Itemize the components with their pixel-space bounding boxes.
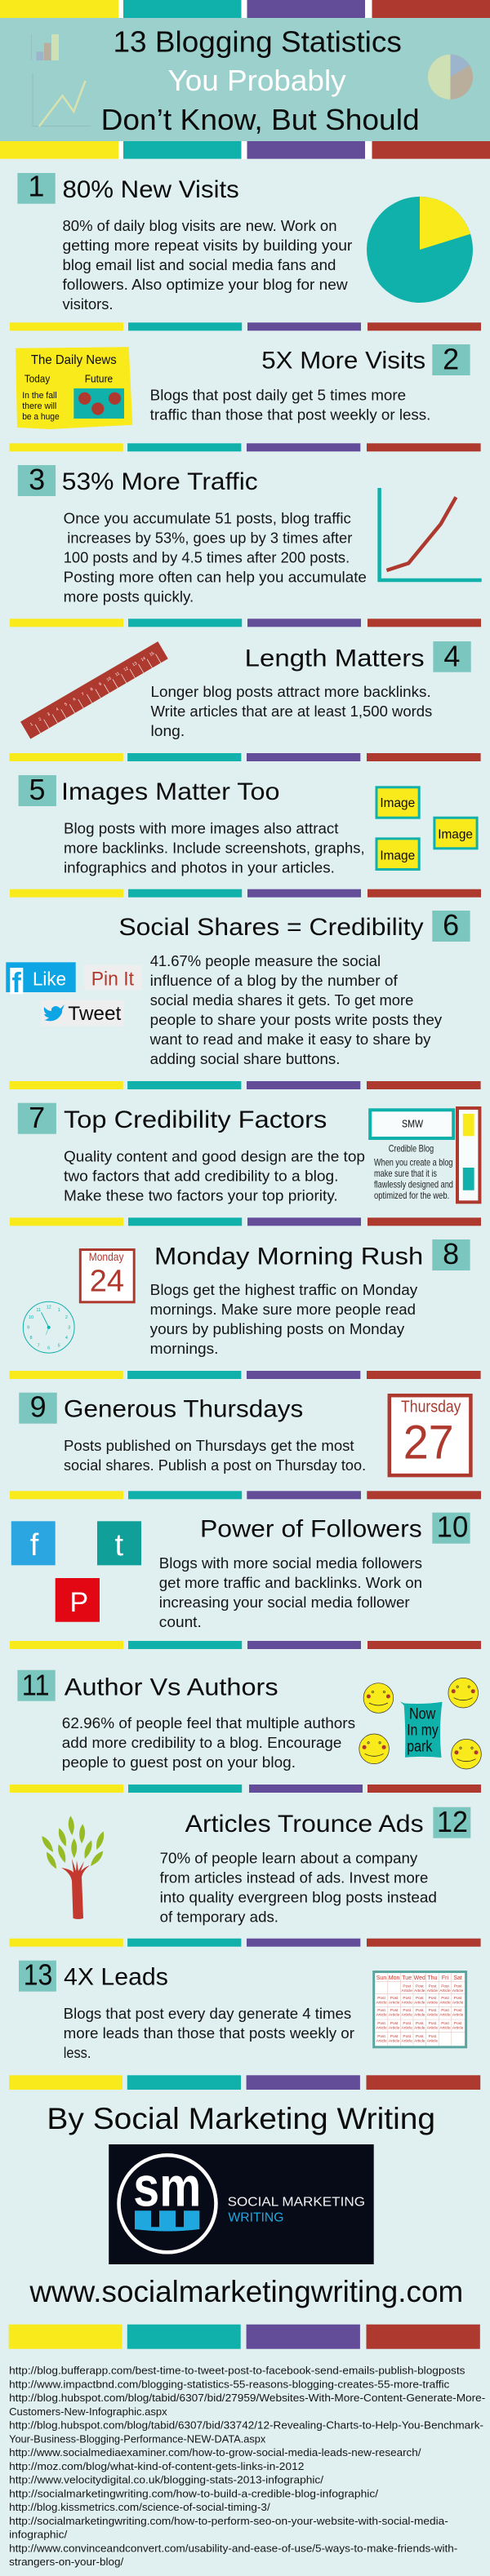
icon: posting calendar: Article <box>452 2001 464 2006</box>
body text: more posts quickly. <box>64 587 194 605</box>
icon: newspaper: The Daily News <box>31 353 117 367</box>
icon: posting calendar: Article <box>414 1989 425 1993</box>
credit heading: By Social Marketing Writing <box>47 2102 435 2135</box>
sources list: http://blog.bufferapp.com/best-time-to-tweet-post-to-facebook-send-emails-publish-blogposts <box>9 2365 466 2377</box>
number badge 12: 12 <box>437 1805 468 1838</box>
icon: clock: 4 <box>65 1336 68 1341</box>
icon: posting calendar: Article <box>414 2026 425 2031</box>
heading: Images Matter Too <box>61 778 279 805</box>
icon: posting calendar: Post <box>403 2034 412 2039</box>
body text: count. <box>159 1613 202 1630</box>
icon: smiley bottom left <box>359 1734 389 1764</box>
number badge 8: 8 <box>443 1237 459 1270</box>
icon: posting calendar: Post <box>454 1996 462 2001</box>
number badge 9: 9 <box>30 1390 47 1424</box>
panel: 5 images matter <box>19 773 477 876</box>
icon: posting calendar: Sat <box>453 1975 462 1981</box>
body text: Write articles that are at least 1,500 words <box>150 703 432 720</box>
icon: clock: 8 <box>29 1336 33 1341</box>
body text <box>64 819 365 876</box>
icon: posting calendar: Sun <box>376 1975 386 1981</box>
heading: Length Matters <box>245 645 425 672</box>
icon: posting calendar: Post <box>403 2021 412 2026</box>
body text: social media shares it gets. To get more <box>150 991 413 1009</box>
body text: want to read and make it easy to share by <box>149 1031 431 1048</box>
icon: clock: 10 <box>29 1315 33 1320</box>
icon: thursday calendar: 27 <box>403 1417 454 1470</box>
body text: more leads than those that posts weekly or <box>64 2024 354 2042</box>
body text: Blogs with more social media followers <box>159 1554 422 1572</box>
icon: posting calendar: Post <box>429 1984 437 1989</box>
sources list: http://blog.hubspot.com/blog/tabid/6307/bid/33742/12-Revealing-Charts-to-Help-You-Benchmark- <box>9 2419 483 2432</box>
icon: note now in my park: park <box>407 1739 433 1756</box>
icon: posting calendar: Article <box>427 1989 438 1993</box>
icon: posting calendar: Article <box>414 2001 425 2006</box>
icon: ruler: 3 <box>47 712 51 717</box>
icon: clock: 2 <box>65 1315 68 1320</box>
body text: influence of a blog by the number of <box>150 972 399 989</box>
icon: clock: 5 <box>58 1343 60 1348</box>
body text <box>159 1554 422 1630</box>
icon: ruler: 8 <box>90 687 94 692</box>
body text <box>150 1281 418 1357</box>
body text: 70% of people learn about a company <box>160 1849 418 1866</box>
sources list: http://www.impactbnd.com/blogging-statistics-55-reasons-blogging-creates-55-more-traffic <box>9 2378 450 2391</box>
logo: social marketing writing: sm <box>133 2155 201 2218</box>
body text <box>62 217 352 313</box>
icon: pinterest tile: P <box>69 1587 88 1618</box>
icon: posting calendar: Article <box>389 2039 400 2044</box>
icon: ruler: 6 <box>73 697 77 703</box>
icon: monday calendar: 24 <box>90 1264 124 1298</box>
icon: posting calendar: Wed <box>414 1975 425 1981</box>
number badge 6 <box>432 908 470 942</box>
sources list: infographic/ <box>9 2529 68 2541</box>
icon: newspaper: Today <box>24 373 51 384</box>
logo: social marketing writing: WRITING <box>228 2211 284 2225</box>
icon: pin it button: Pin It <box>91 969 134 991</box>
number badge 5: 5 <box>29 773 46 806</box>
icon: posting calendar: Article <box>402 2039 412 2044</box>
icon: posting calendar: Article <box>427 2039 438 2044</box>
icon: posting calendar: Post <box>429 2021 437 2026</box>
body text: of temporary ads. <box>160 1908 278 1925</box>
icon: posting calendar: Article <box>402 2001 412 2006</box>
icon: posting calendar: Post <box>441 1984 449 1989</box>
icon: image placeholder right: Image <box>438 827 473 841</box>
icon: posting calendar: Post <box>390 2021 399 2026</box>
icon: posting calendar: Article <box>427 2026 438 2031</box>
heading: Power of Followers <box>200 1516 422 1543</box>
icon: posting calendar <box>374 1971 466 2047</box>
body text: people to share your posts write posts they <box>150 1011 443 1028</box>
body text <box>64 2005 354 2061</box>
title text: Don’t Know, But Should <box>101 103 420 136</box>
icon: posting calendar: Post <box>454 2008 462 2013</box>
icon: posting calendar: Post <box>377 2034 385 2039</box>
body text: increases by 53%, goes up by 3 times after <box>67 529 352 546</box>
icon: posting calendar: Article <box>414 2039 425 2044</box>
sources list: http://www.socialmediaexaminer.com/how-to-grow-social-media-leads-new-research/ <box>9 2446 421 2459</box>
icon: twitter tile <box>97 1521 141 1565</box>
icon: posting calendar: Article <box>402 2026 412 2031</box>
pie chart 80 percent <box>367 197 473 303</box>
logo: social marketing writing: SOCIAL MARKETING <box>228 2195 365 2209</box>
title text: You Probably <box>168 64 346 97</box>
heading: Top Credibility Factors <box>64 1106 327 1133</box>
heading: 53% More Traffic <box>62 468 258 495</box>
icon: credible blog mockup: optimized for the web. <box>374 1190 449 1201</box>
icon: facebook tile <box>11 1521 56 1565</box>
icon: posting calendar: Post <box>390 2008 399 2013</box>
icon: posting calendar: Post <box>416 2008 424 2013</box>
icon: image placeholder top: Image <box>380 796 415 810</box>
body text <box>150 386 430 423</box>
icon: smiley bottom right <box>452 1739 481 1769</box>
icon: posting calendar: Post <box>441 2021 449 2026</box>
icon: posting calendar: Post <box>390 1996 399 2001</box>
number badge 7: 7 <box>29 1101 45 1134</box>
sources list: http://blog.kissmetrics.com/science-of-social-timing-3/ <box>9 2501 270 2513</box>
number badge 1: 1 <box>28 170 44 203</box>
body text: less. <box>64 2044 91 2061</box>
icon: ruler: 15 <box>149 651 155 658</box>
body text: mornings. <box>150 1340 219 1357</box>
icon: credible blog mockup: Credible Blog <box>389 1143 434 1155</box>
icon: newspaper: In the fall <box>22 391 57 401</box>
icon: ruler: 5 <box>64 702 69 707</box>
icon: posting calendar: Article <box>427 2001 438 2006</box>
icon: posting calendar: Post <box>429 2008 437 2013</box>
icon: credible blog mockup: make sure that it is <box>374 1168 437 1179</box>
icon: posting calendar: Article <box>439 2001 451 2006</box>
body text: Blogs get the highest traffic on Monday <box>150 1281 418 1298</box>
icon: posting calendar: Article <box>414 2013 425 2018</box>
body text: Posts published on Thursdays get the most <box>64 1437 354 1454</box>
icon: posting calendar: Thu <box>427 1975 438 1981</box>
icon: posting calendar: Mon <box>389 1975 400 1981</box>
number badge 1 <box>17 170 56 204</box>
heading: Social Shares = Credibility <box>118 914 424 941</box>
icon: posting calendar: Post <box>403 2008 412 2013</box>
icon: posting calendar: Tue <box>402 1975 412 1981</box>
icon: newspaper: Future <box>85 373 113 384</box>
icon: posting calendar: Article <box>402 2013 412 2018</box>
icon: clock <box>23 1301 74 1353</box>
icon: posting calendar: Post <box>416 1984 424 1989</box>
body text: traffic than those that post weekly or less. <box>150 406 430 423</box>
body text <box>149 952 443 1067</box>
heading: Generous Thursdays <box>64 1396 303 1423</box>
body text <box>160 1849 437 1925</box>
body text: yours by publishing posts on Monday <box>150 1320 405 1337</box>
body text: followers. Also optimize your blog for new <box>62 276 348 293</box>
body text: blog email list and social media fans and <box>62 256 336 273</box>
icon: thursday calendar <box>390 1395 470 1475</box>
icon: clock: 9 <box>27 1326 29 1331</box>
icon: note now in my park: In my <box>407 1723 439 1740</box>
body text: infographics and photos in your articles. <box>64 858 335 876</box>
icon: facebook like button: Like <box>33 969 66 990</box>
number badge 7 <box>18 1101 56 1134</box>
body text: Quality content and good design are the top <box>64 1147 365 1164</box>
icon: faded line chart <box>33 73 91 126</box>
icon: posting calendar: Post <box>403 1996 412 2001</box>
body text: get more traffic and backlinks. Work on <box>159 1574 422 1591</box>
icon: newspaper: be a huge <box>22 412 60 422</box>
line chart: rising traffic <box>380 488 482 580</box>
icon: posting calendar: Post <box>377 2021 385 2026</box>
icon: credible blog mockup: When you create a blog <box>374 1156 452 1168</box>
body text: Longer blog posts attract more backlinks. <box>150 683 431 700</box>
body text: Blogs that post daily get 5 times more <box>150 386 406 403</box>
sources list <box>9 2365 485 2568</box>
icon: faded bar chart <box>31 34 59 60</box>
icon: ruler: 1 <box>29 722 34 727</box>
number badge 13: 13 <box>24 1958 52 1992</box>
icon: clock: 6 <box>47 1346 50 1351</box>
icon: posting calendar: Post <box>390 2034 399 2039</box>
body text: 62.96% of people feel that multiple authors <box>62 1714 355 1731</box>
icon: posting calendar: Article <box>376 2013 387 2018</box>
body text: long. <box>150 722 185 739</box>
icon: twitter tile: t <box>115 1528 124 1563</box>
icon: clock: 3 <box>68 1326 70 1331</box>
icon: posting calendar: Article <box>452 2026 464 2031</box>
heading: Articles Trounce Ads <box>185 1811 424 1838</box>
icon: credible blog mockup: flawlessly designed and <box>374 1178 453 1190</box>
panel: 3 more traffic <box>18 463 482 605</box>
icon: thursday calendar: Thursday <box>401 1399 461 1417</box>
body text: Make these two factors your top priority. <box>64 1186 338 1204</box>
icon: ruler: 9 <box>98 681 103 687</box>
icon: tweet button <box>42 1000 124 1026</box>
icon: facebook like button <box>6 962 76 999</box>
icon: ruler: 12 <box>123 666 130 672</box>
icon: newspaper: there will <box>22 401 56 411</box>
body text <box>64 1437 366 1474</box>
icon: image placeholder top <box>376 787 419 818</box>
sources list: Your-Business-Blogging-Performance-NEW-DATA.aspx <box>9 2433 266 2445</box>
icon: posting calendar: Fri <box>442 1975 449 1981</box>
icon: posting calendar: Post <box>377 1996 385 2001</box>
icon: posting calendar: Article <box>389 2026 400 2031</box>
panel: 13 four times leads <box>19 1958 466 2061</box>
number badge 10: 10 <box>437 1510 468 1544</box>
number badge 11: 11 <box>22 1668 49 1701</box>
panel: title banner <box>0 18 490 141</box>
icon: posting calendar: Article <box>402 1989 412 1993</box>
icon: posting calendar: Post <box>416 1996 424 2001</box>
icon: clock: 7 <box>38 1343 40 1348</box>
panel: 2 more visits <box>16 342 470 429</box>
body text: two factors that add credibility to a blog. <box>64 1167 339 1184</box>
sources list: http://blog.hubspot.com/blog/tabid/6307/bid/27959/Websites-With-More-Content-Generate-More- <box>9 2392 485 2404</box>
body text: 80% of daily blog visits are new. Work on <box>62 217 336 234</box>
heading: 5X More Visits <box>261 348 425 375</box>
body text: social shares. Publish a post on Thursday too. <box>64 1456 366 1474</box>
icon: pinterest tile <box>56 1578 100 1622</box>
panel: 9 generous thursdays <box>19 1390 470 1475</box>
icon: posting calendar: Article <box>439 2013 451 2018</box>
panel: 6 social shares <box>6 908 470 1067</box>
panel: 10 power of followers <box>11 1510 470 1630</box>
heading: 4X Leads <box>64 1964 168 1991</box>
panel: 11 author vs authors <box>17 1668 481 1771</box>
icon: posting calendar: Post <box>441 2008 449 2013</box>
icon: credible blog mockup: SMW <box>402 1118 424 1130</box>
icon: posting calendar: Post <box>377 2008 385 2013</box>
body text: mornings. Make sure more people read <box>150 1301 416 1318</box>
icon: posting calendar: Article <box>427 2013 438 2018</box>
number badge 4 <box>433 640 471 673</box>
body text: Posting more often can help you accumulate <box>64 568 367 585</box>
body text: Once you accumulate 51 posts, blog traffic <box>64 509 351 526</box>
icon: image placeholder bottom <box>376 839 419 870</box>
number badge 2: 2 <box>443 342 459 375</box>
icon: newspaper <box>16 347 132 429</box>
sources list: strangers-on-your-blog/ <box>9 2556 124 2568</box>
icon: clock: 12 <box>47 1306 51 1310</box>
number badge 8 <box>432 1237 470 1270</box>
icon: posting calendar: Article <box>439 1989 451 1993</box>
icon: note now in my park: Now <box>409 1706 436 1723</box>
icon: tweet button: Tweet <box>68 1003 122 1025</box>
number badge 9 <box>19 1390 57 1424</box>
body text: 41.67% people measure the social <box>150 952 381 969</box>
icon: ruler: 2 <box>38 717 42 722</box>
body text: Blogs that post every day generate 4 times <box>64 2005 351 2022</box>
icon: clock: 11 <box>36 1308 41 1313</box>
icon: posting calendar: Article <box>389 2001 400 2006</box>
title text <box>101 24 420 136</box>
number badge 6: 6 <box>443 908 459 942</box>
body text: getting more repeat visits by building your <box>62 237 352 254</box>
body text: increasing your social media follower <box>159 1594 410 1611</box>
icon: posting calendar: Article <box>452 2013 464 2018</box>
icon: posting calendar: Article <box>439 2026 451 2031</box>
body text <box>150 683 432 739</box>
icon: ruler: 10 <box>106 676 113 683</box>
icon: ruler: 14 <box>140 656 147 663</box>
icon: tree <box>39 1816 106 1919</box>
icon: facebook like button: f <box>11 968 21 999</box>
number badge 5 <box>19 773 56 806</box>
heading: Author Vs Authors <box>65 1674 278 1700</box>
icon: faded pie chart <box>428 55 473 100</box>
body text: people to guest post on your blog. <box>62 1754 296 1771</box>
body text: more backlinks. Include screenshots, graphs, <box>64 839 365 856</box>
heading: Monday Morning Rush <box>154 1244 423 1270</box>
body text: Blog posts with more images also attract <box>64 819 338 836</box>
website url: www.socialmarketingwriting.com <box>29 2275 463 2308</box>
title text: 13 Blogging Statistics <box>113 24 402 58</box>
icon: ruler: 11 <box>114 672 121 677</box>
body text <box>64 509 367 605</box>
panel: 12 articles trounce ads <box>39 1805 470 1925</box>
heading: 80% New Visits <box>62 176 239 203</box>
body text: add more credibility to a blog. Encourage <box>62 1734 341 1751</box>
panel: credit and logo <box>29 2102 463 2308</box>
icon: monday calendar <box>80 1250 134 1302</box>
icon: image placeholder bottom: Image <box>380 849 415 862</box>
icon: posting calendar: Post <box>441 1996 449 2001</box>
panel: 4 length matters <box>20 640 471 739</box>
icon: image placeholder right <box>434 818 477 849</box>
body text: visitors. <box>62 295 113 313</box>
icon: pin it button <box>84 965 141 991</box>
sources list: http://www.velocitydigital.co.uk/blogging-stats-2013-infographic/ <box>9 2474 324 2486</box>
icon: facebook tile: f <box>30 1528 39 1563</box>
sources list: http://moz.com/blog/what-kind-of-content-gets-links-in-2012 <box>9 2460 304 2472</box>
body text <box>62 1714 355 1771</box>
icon: posting calendar: Article <box>389 2013 400 2018</box>
body text: from articles instead of ads. Invest more <box>160 1869 428 1886</box>
body text: into quality evergreen blog posts instead <box>160 1888 437 1905</box>
icon: ruler: 13 <box>131 661 138 667</box>
icon: posting calendar: Post <box>454 1984 462 1989</box>
icon: clock: 1 <box>58 1308 60 1313</box>
number badge 3 <box>18 463 56 496</box>
sources list: Customers-New-Infographic.aspx <box>9 2405 167 2418</box>
number badge 2 <box>432 342 470 375</box>
number badge 4: 4 <box>443 640 460 673</box>
icon: posting calendar: Post <box>429 2034 437 2039</box>
icon: monday calendar: Monday <box>89 1250 124 1263</box>
panel: 1 new visits <box>17 170 473 313</box>
panel: 8 monday morning rush <box>23 1237 470 1357</box>
body text <box>64 1147 365 1204</box>
icon: ruler: 4 <box>56 707 60 712</box>
body text: adding social share buttons. <box>150 1050 340 1067</box>
icon: posting calendar: Post <box>403 1984 412 1989</box>
icon: credible blog mockup <box>370 1108 479 1202</box>
icon: posting calendar: Article <box>376 2039 387 2044</box>
icon: posting calendar: Article <box>452 1989 464 1993</box>
logo: social marketing writing <box>109 2144 374 2264</box>
icon: note now in my park <box>400 1701 443 1758</box>
sources list: http://www.convinceandconvert.com/usability-and-ease-of-use/5-ways-to-make-friends-with- <box>9 2543 457 2554</box>
icon: posting calendar: Post <box>429 1996 437 2001</box>
icon: posting calendar: Post <box>416 2034 424 2039</box>
sources list: http://socialmarketingwriting.com/how-to-perform-seo-on-your-website-with-social-media- <box>9 2515 448 2527</box>
icon: posting calendar: Article <box>376 2026 387 2031</box>
icon: posting calendar: Post <box>454 2021 462 2026</box>
panel: 7 credibility factors <box>18 1101 479 1204</box>
icon: ruler: 7 <box>81 692 86 697</box>
number badge 3: 3 <box>29 463 45 496</box>
body text: 100 posts and by 4.5 times after 200 posts. <box>64 548 350 565</box>
sources list: http://socialmarketingwriting.com/how-to-build-a-credible-blog-infographic/ <box>9 2487 379 2500</box>
icon: smiley top left <box>363 1683 394 1713</box>
icon: posting calendar: Article <box>376 2001 387 2006</box>
icon: smiley top right <box>448 1678 479 1708</box>
icon: posting calendar: Post <box>416 2021 424 2026</box>
icon: ruler <box>20 641 168 739</box>
